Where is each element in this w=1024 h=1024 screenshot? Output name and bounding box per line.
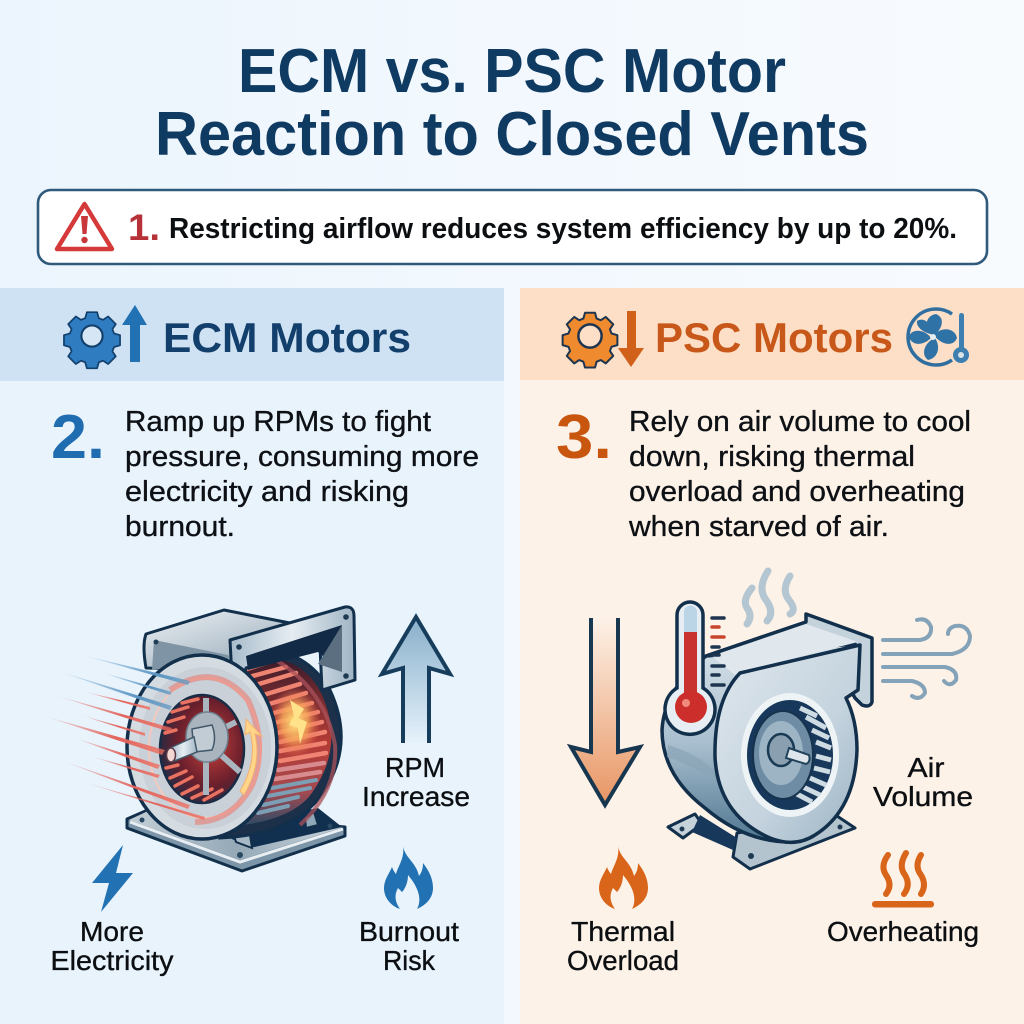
icon: fan with temperature probe — [908, 309, 969, 365]
motor front ring — [127, 655, 277, 839]
motor shaft — [768, 734, 794, 766]
title: Reaction to Closed Vents — [155, 100, 869, 169]
label: thermal overload: Overload — [567, 945, 679, 976]
motor inner opening — [160, 695, 244, 803]
illustration: ECM blower motor — [44, 607, 355, 871]
callout: efficiency warning — [38, 190, 987, 264]
illustration: PSC blower motor — [662, 571, 970, 869]
label: RPM increase — [362, 752, 470, 812]
panel: ECM motors — [0, 288, 504, 1024]
label: burnout risk: Risk — [383, 945, 435, 976]
icon: orange flame — [599, 846, 648, 909]
motor feet — [668, 814, 855, 869]
motor red fan drum — [220, 650, 341, 838]
PSC description: down, risking thermal — [629, 441, 915, 473]
label: burnout risk — [359, 916, 459, 976]
icon: lightning bolt — [92, 845, 133, 912]
rotation arrow — [240, 719, 262, 795]
ECM description — [125, 406, 479, 543]
label: air volume: Volume — [873, 781, 973, 812]
motor rear body — [662, 622, 868, 842]
ECM description: pressure, consuming more — [125, 441, 479, 473]
label: air volume: Air — [908, 752, 944, 783]
ECM description: burnout. — [125, 511, 235, 543]
PSC description — [628, 406, 971, 543]
motor front housing — [715, 645, 860, 842]
label: air volume — [873, 752, 973, 812]
thermometer — [665, 602, 724, 734]
PSC description: when starved of air. — [628, 511, 889, 543]
ECM description: electricity and risking — [125, 476, 409, 508]
PSC description: Rely on air volume to cool — [629, 406, 971, 438]
fan heat spark — [269, 686, 321, 758]
PSC number 3: 3. — [556, 403, 612, 472]
motor hub spokes — [206, 698, 240, 795]
motor rim of drum — [276, 660, 335, 825]
ECM number 2: 2. — [51, 403, 105, 472]
motor base plate — [127, 808, 345, 871]
PSC header band — [520, 288, 1024, 380]
arrow: RPM increase — [382, 617, 450, 743]
icon: blue flame — [384, 846, 433, 909]
motor shaft — [166, 725, 214, 762]
motor top duct — [144, 610, 332, 670]
steam wisps — [745, 571, 793, 624]
label: more electricity: More — [80, 916, 144, 947]
callout text: Restricting airflow reduces system efficiency by up to 20%. — [169, 213, 957, 245]
label: RPM increase: RPM — [385, 752, 445, 783]
title: ECM vs. PSC Motor — [238, 37, 786, 106]
outlet duct — [706, 614, 872, 706]
PSC description: overload and overheating — [629, 476, 965, 508]
ECM description: Ramp up RPMs to fight — [125, 406, 431, 438]
label: more electricity — [50, 916, 174, 976]
arrow: thermal decline — [571, 618, 640, 805]
speed lines — [44, 655, 205, 820]
label: burnout risk: Burnout — [359, 916, 459, 947]
motor inner opening — [741, 693, 839, 817]
icon: gear with down arrow — [563, 311, 644, 368]
airflow swirls — [883, 619, 970, 698]
ECM header band — [0, 288, 504, 381]
outlet frame — [230, 607, 355, 698]
PSC heading: PSC Motors — [655, 314, 893, 361]
label: RPM increase: Increase — [362, 781, 470, 812]
icon: heat waves — [872, 853, 934, 908]
title — [155, 37, 869, 169]
label: overheating: Overheating — [827, 916, 979, 947]
icon: warning triangle — [57, 204, 112, 249]
ECM heading: ECM Motors — [163, 314, 411, 361]
label: thermal overload — [567, 916, 679, 976]
panel: PSC motors — [520, 288, 1024, 1024]
icon: gear with up arrow — [64, 305, 147, 368]
label: more electricity: Electricity — [50, 945, 174, 976]
thermometer scale — [712, 618, 724, 685]
label: thermal overload: Thermal — [571, 916, 675, 947]
callout number 1: 1. — [128, 207, 160, 248]
